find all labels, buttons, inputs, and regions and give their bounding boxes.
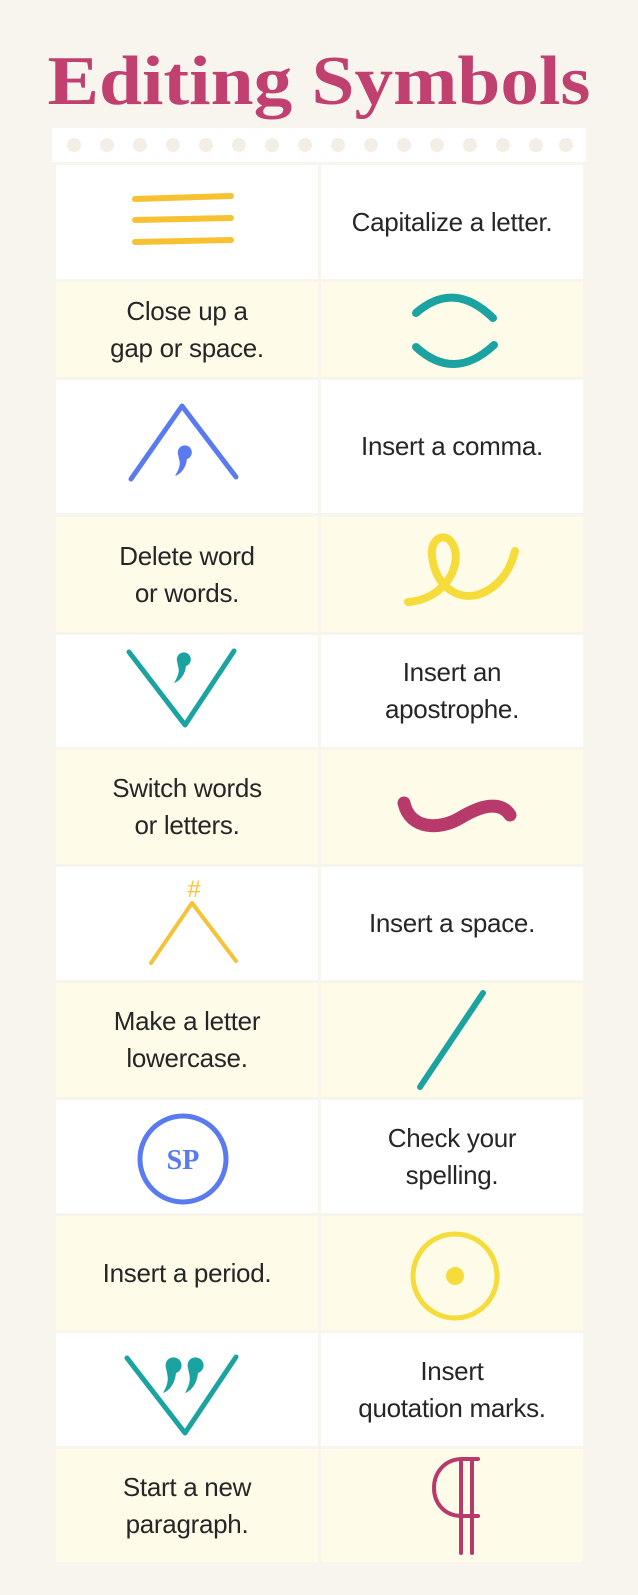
icon: comma caret <box>131 406 236 479</box>
text: capitalize <box>321 165 583 279</box>
text: quotation: Insert <box>420 1356 484 1386</box>
icon: period circle <box>413 1234 497 1318</box>
icon: space caret: # <box>187 876 201 903</box>
text: lowercase <box>56 983 318 1097</box>
text: apostrophe: apostrophe. <box>385 694 519 724</box>
text: apostrophe: Insert an <box>403 657 501 687</box>
text: spelling <box>321 1100 583 1213</box>
text: period: Insert a period. <box>103 1258 271 1288</box>
text: switch: or letters. <box>134 810 240 840</box>
text: paragraph: paragraph. <box>126 1508 248 1538</box>
text: close up: Close up a <box>126 296 248 326</box>
icon: switch tilde <box>404 803 510 826</box>
row 1 cells <box>56 165 318 279</box>
text: space: Insert a space. <box>369 908 535 938</box>
text: space <box>321 867 583 980</box>
text: capitalize: Capitalize a letter. <box>352 206 552 236</box>
text: delete <box>56 517 318 632</box>
icon: apostrophe V <box>129 651 234 725</box>
text: delete: or words. <box>135 578 239 608</box>
icon: close up arcs <box>416 298 494 364</box>
text: apostrophe <box>321 635 583 747</box>
icon: capitalize lines <box>135 196 231 242</box>
text: switch <box>56 750 318 864</box>
text: delete: Delete word <box>119 540 255 570</box>
text: lowercase: Make a letter <box>114 1006 260 1036</box>
text: period <box>56 1216 318 1330</box>
text: quotation <box>321 1333 583 1446</box>
icon: delete loop <box>408 537 515 602</box>
text: spelling: Check your <box>388 1122 516 1152</box>
icon: quotation V <box>127 1357 236 1433</box>
text: switch: Switch words <box>112 773 262 803</box>
text: close up: gap or space. <box>110 332 264 362</box>
text: paragraph: Start a new <box>123 1472 251 1502</box>
paper strip <box>52 128 586 162</box>
text: spelling: spelling. <box>406 1160 498 1190</box>
icon: space caret <box>151 876 236 963</box>
icon: SP circle <box>140 1116 226 1202</box>
title: Editing Symbols <box>48 43 590 120</box>
text: quotation: quotation marks. <box>358 1392 546 1422</box>
text: paragraph <box>56 1449 318 1562</box>
text: comma: Insert a comma. <box>361 431 543 461</box>
icon: SP circle: SP <box>167 1145 199 1176</box>
text: lowercase: lowercase. <box>126 1043 248 1073</box>
text: close up <box>56 282 318 377</box>
text: comma <box>321 380 583 513</box>
icon: pilcrow <box>434 1459 478 1553</box>
icon: lowercase slash <box>420 993 483 1087</box>
